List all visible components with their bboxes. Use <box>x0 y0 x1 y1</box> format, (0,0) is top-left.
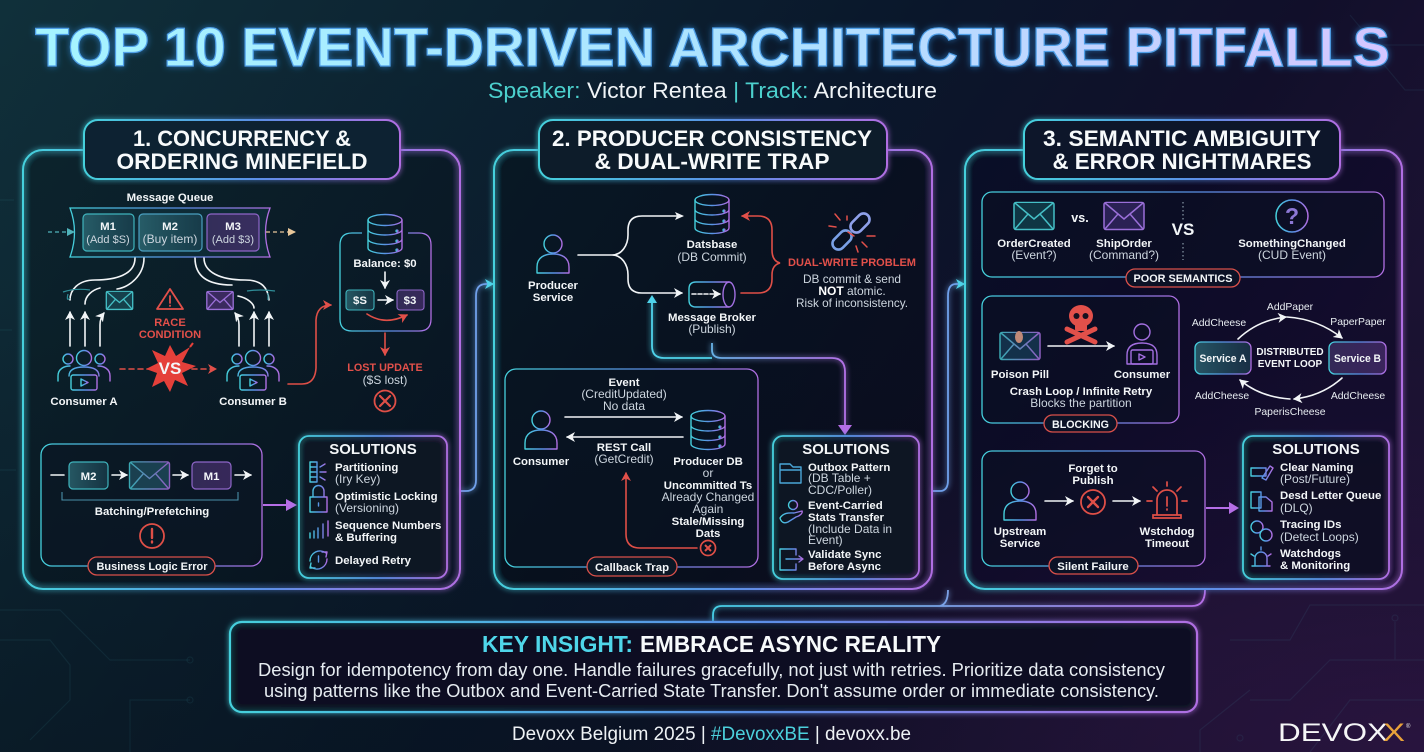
message broker <box>668 282 757 336</box>
database <box>677 194 747 264</box>
heading: panel 1: 1. CONCURRENCY & <box>133 126 351 151</box>
icon: poison pill <box>1015 331 1023 343</box>
logo: devoxx <box>1278 719 1411 747</box>
dual-write problem text: DUAL-WRITE PROBLEM <box>788 257 916 269</box>
solutions 2: Event-Carried <box>808 500 883 512</box>
consumer A message flows <box>63 258 144 346</box>
solutions 1: Partitioning <box>335 462 398 474</box>
callback trap panel: Consumer <box>513 456 570 468</box>
heading: panel 3: 3. SEMANTIC AMBIGUITY <box>1043 126 1321 151</box>
pill: business logic error <box>88 557 215 575</box>
message queue: (Add $3) <box>212 234 254 246</box>
balance database: $S <box>353 295 367 307</box>
producer service: Producer <box>528 280 579 292</box>
consumer B message flows <box>195 258 275 346</box>
heading: panel 2 <box>539 120 887 179</box>
distributed event loop: AddCheese <box>1192 318 1246 329</box>
callback trap panel: Stale/Missing <box>672 516 744 528</box>
distributed event loop <box>1192 302 1386 418</box>
icon: tracing loops <box>1251 521 1272 541</box>
message broker: (Publish) <box>688 322 736 336</box>
icon: delayed retry <box>310 551 327 569</box>
heading: panel 2: 2. PRODUCER CONSISTENCY <box>552 126 872 151</box>
pill: blocking <box>1044 415 1117 432</box>
icon: lock <box>310 486 327 512</box>
solutions 1: & Buffering <box>335 532 397 544</box>
poor semantics panel: (CUD Event) <box>1258 248 1326 262</box>
poor semantics panel: OrderCreated <box>997 238 1071 250</box>
pill: callback trap <box>587 557 677 576</box>
solutions 3: Tracing IDs <box>1280 519 1341 531</box>
icon: clear naming tag <box>1251 466 1273 480</box>
poor semantics panel: VS <box>1172 220 1194 239</box>
icon: watchdog siren <box>1251 547 1271 566</box>
solutions 2: (DB Table + <box>808 471 871 485</box>
database: Datsbase <box>687 239 737 251</box>
panel 2: producer consistency <box>494 120 932 589</box>
batching panel <box>41 444 262 575</box>
batching panel: M1 <box>204 471 220 483</box>
consumer A <box>50 350 118 408</box>
lost update: LOST UPDATE <box>347 362 423 374</box>
message queue: M1 <box>100 221 117 233</box>
pill: silent failure <box>1049 557 1138 574</box>
blocking panel: Blocks the partition <box>1030 396 1132 410</box>
blocking panel <box>982 296 1179 432</box>
icon: folder <box>780 464 801 483</box>
message queue <box>48 192 296 257</box>
callback trap panel: Dats <box>696 528 720 540</box>
lost update: ($S lost) <box>363 373 407 387</box>
callback trap panel: Again <box>693 502 723 516</box>
distributed event loop: DISTRIBUTED <box>1256 347 1324 358</box>
icon: sequence bars <box>310 521 328 538</box>
key insight callout: EMBRACE ASYNC REALITY <box>640 631 941 657</box>
balance database <box>340 214 431 331</box>
solutions 3: (Detect Loops) <box>1280 530 1359 544</box>
icon: partitioning <box>310 462 326 482</box>
solutions 3: SOLUTIONS <box>1272 441 1360 458</box>
race condition label: RACE <box>154 317 186 329</box>
solutions 1: (Iry Key) <box>335 472 380 486</box>
key insight callout: using patterns like the Outbox and Event-Carried State Transfer. Don't assume order or immediate consistency. <box>264 680 1159 701</box>
callback trap panel <box>505 369 758 576</box>
poor semantics panel: ShipOrder <box>1096 238 1152 250</box>
message queue: (Buy item) <box>143 232 197 246</box>
pill: callback trap: Callback Trap <box>595 562 669 574</box>
silent failure panel: Wstchdog <box>1139 526 1195 538</box>
consumer with laptop <box>1127 324 1157 364</box>
message queue: (Add $S) <box>86 234 130 246</box>
pill: business logic error: Business Logic Error <box>96 561 208 573</box>
solutions 3: Watchdogs <box>1280 548 1341 560</box>
blocking panel: Consumer <box>1114 369 1171 381</box>
pill: blocking: BLOCKING <box>1052 419 1109 431</box>
race condition label: CONDITION <box>139 329 201 341</box>
solutions 2: Stats Transfer <box>808 512 885 524</box>
solutions 2: Outbox Pattern <box>808 462 890 474</box>
consumer B <box>219 350 287 408</box>
solutions 2: SOLUTIONS <box>802 441 890 458</box>
solutions 1 <box>299 436 447 578</box>
pill: poor semantics <box>1126 269 1240 287</box>
silent failure panel: Upstream <box>994 526 1046 538</box>
balance database: $3 <box>404 295 416 307</box>
heading: panel 1: ORDERING MINEFIELD <box>116 149 368 174</box>
callback trap panel: REST Call <box>597 442 651 454</box>
poor semantics panel: (Event?) <box>1011 248 1057 262</box>
balance database: Balance: $0 <box>353 258 417 270</box>
icon: siren <box>1147 482 1187 518</box>
blocking panel: Poison Pill <box>991 369 1049 381</box>
heading: panel 3: & ERROR NIGHTMARES <box>1052 149 1312 174</box>
blocking panel: Crash Loop / Infinite Retry <box>1010 386 1153 398</box>
panel 3: semantic ambiguity <box>965 120 1402 589</box>
batching panel: M2 <box>81 471 96 483</box>
message broker: Message Broker <box>668 312 757 324</box>
arrow tip to database <box>675 212 684 220</box>
logo: devoxx: X <box>1383 719 1405 747</box>
solutions 2: (Include Data in <box>808 522 892 536</box>
consumer A: Consumer A <box>50 396 118 408</box>
icon: validate door <box>780 549 803 570</box>
solutions 1: Delayed Retry <box>335 555 412 567</box>
icon: dead letter documents <box>1251 492 1272 511</box>
connector: panel 1 to panel 2 <box>460 284 493 491</box>
arrow: batching to solutions <box>263 499 297 511</box>
solutions 2: Event) <box>808 533 843 547</box>
heading: panel 2: & DUAL-WRITE TRAP <box>594 149 830 174</box>
poor semantics panel: ? <box>1285 203 1299 229</box>
message queue: M2 <box>162 221 178 233</box>
connector: panels to key insight <box>713 590 1205 622</box>
callback trap panel: Uncommitted Ts <box>664 480 752 492</box>
subtitle: Speaker: Victor Rentea | Track: Architecture <box>488 78 937 103</box>
race condition label <box>139 317 201 341</box>
message queue: M3 <box>225 221 241 233</box>
footer: Devoxx Belgium 2025 | #DevoxxBE | devoxx.be <box>512 724 911 745</box>
callback trap panel: (GetCredit) <box>594 452 654 466</box>
silent failure panel: Forget to <box>1068 463 1118 475</box>
lost update <box>347 333 423 412</box>
key insight callout <box>230 622 1197 712</box>
VS race burst: VS <box>159 359 181 378</box>
silent failure panel: Timeout <box>1145 538 1189 550</box>
arrow: consumer B to balance <box>288 305 331 384</box>
poor semantics panel: (Command?) <box>1089 248 1159 262</box>
VS race burst <box>120 343 216 392</box>
callback trap panel: Producer DB <box>673 456 743 468</box>
solutions 1: Optimistic Locking <box>335 491 438 503</box>
distributed event loop: Service B <box>1334 353 1381 365</box>
poor semantics panel: vs. <box>1071 211 1089 225</box>
connector: broker feedback to callback and solutions <box>647 295 852 435</box>
arrow: silent failure to solutions <box>1206 502 1239 514</box>
icon: skull <box>1067 305 1095 342</box>
callback trap panel: Already Changed <box>662 490 754 504</box>
silent failure panel <box>982 451 1205 574</box>
solutions 1: SOLUTIONS <box>329 441 417 458</box>
callback trap panel: Event <box>608 377 640 389</box>
silent failure panel: Publish <box>1072 475 1114 487</box>
solutions 3: (Post/Future) <box>1280 472 1350 486</box>
solutions 2: Before Async <box>808 561 881 573</box>
title: TOP 10 EVENT-DRIVEN ARCHITECTURE PITFALLS <box>35 17 1390 78</box>
callback trap panel: (CreditUpdated) <box>581 387 667 401</box>
callback trap panel: No data <box>603 399 645 413</box>
message queue: Message Queue <box>127 192 213 204</box>
solutions 1: (Versioning) <box>335 501 399 515</box>
consumer B: Consumer B <box>219 396 287 408</box>
key insight callout: Design for idempotency from day one. Handle failures gracefully, not just with retries. Prioritize data consistency <box>258 659 1166 680</box>
icon: race warning <box>157 289 183 309</box>
distributed event loop: Service A <box>1200 353 1246 365</box>
solutions 3: & Monitoring <box>1280 560 1350 572</box>
solutions 3 <box>1243 436 1389 579</box>
dual-write problem text <box>788 257 916 310</box>
logo: devoxx: DEVOX <box>1278 719 1388 747</box>
poor semantics panel: SomethingChanged <box>1238 238 1346 250</box>
dual-write problem text: NOT atomic. <box>818 284 886 298</box>
distributed event loop: AddPaper <box>1267 302 1314 313</box>
solutions 2: Validate Sync <box>808 549 881 561</box>
icon: hand with data <box>780 511 802 523</box>
callback trap panel: or <box>703 466 713 480</box>
distributed event loop: AddCheese <box>1331 391 1385 402</box>
distributed event loop: PaperisCheese <box>1254 407 1326 418</box>
solutions 2: CDC/Poller) <box>808 483 872 497</box>
distributed event loop: EVENT LOOP <box>1258 359 1323 370</box>
dual-write problem text: Risk of inconsistency. <box>796 296 908 310</box>
key insight callout: KEY INSIGHT: <box>482 631 633 657</box>
dual write fork <box>578 216 682 293</box>
silent failure panel: Service <box>1000 538 1040 550</box>
poor semantics panel <box>982 192 1384 287</box>
solutions 1: Sequence Numbers <box>335 520 441 532</box>
icon: broken link <box>829 211 875 252</box>
solutions 3: Desd Letter Queue <box>1280 490 1381 502</box>
solutions 3: Clear Naming <box>1280 462 1353 474</box>
panel 1: concurrency and ordering <box>23 120 460 589</box>
producer service <box>528 235 579 304</box>
pill: poor semantics: POOR SEMANTICS <box>1134 273 1233 285</box>
distributed event loop: AddCheese <box>1195 391 1249 402</box>
heading: panel 1 <box>84 120 400 179</box>
solutions 2 <box>773 436 919 579</box>
solutions 3: (DLQ) <box>1280 501 1313 515</box>
database: (DB Commit) <box>677 250 747 264</box>
dual-write problem text: DB commit & send <box>803 272 901 286</box>
batching panel: Batching/Prefetching <box>95 506 209 518</box>
distributed event loop: PaperPaper <box>1330 317 1386 328</box>
red brace arrows <box>741 216 780 293</box>
pill: silent failure: Silent Failure <box>1057 561 1129 573</box>
connector: panel 2 to panel 3 <box>932 284 964 491</box>
heading: panel 3 <box>1024 120 1340 179</box>
producer service: Service <box>533 292 573 304</box>
logo: devoxx: ® <box>1406 723 1411 730</box>
